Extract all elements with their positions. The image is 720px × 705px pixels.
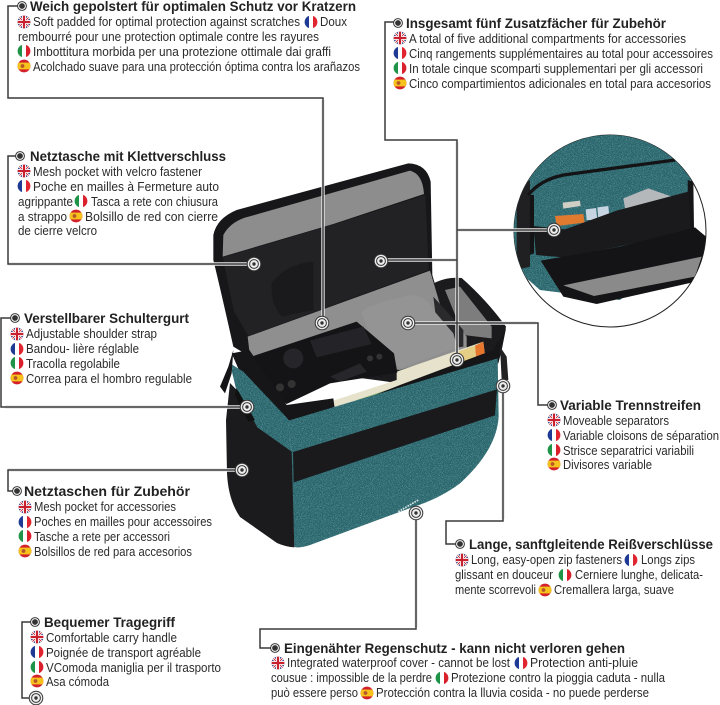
- heading: rain cover: Eingenähter Regenschutz - kann nicht verloren gehen: [284, 640, 625, 656]
- bag body: [220, 328, 508, 547]
- panel: adjustable shoulder strap: [10, 310, 192, 386]
- camera: [249, 322, 397, 404]
- panel: mesh pocket with velcro: Poche en mailles à Fermeture auto: [33, 180, 219, 194]
- panel: mesh pockets for accessories: Poches en mailles pour accessoires: [34, 515, 212, 529]
- panel: mesh pockets for accessories: [13, 483, 212, 559]
- panel: five additional compartments: A total of five additional compartments for accessories: [409, 32, 686, 46]
- panel: mesh pockets for accessories: Bolsillos de red para accesorios: [34, 545, 192, 559]
- panel: long zip fasteners: Cremallera larga, suave: [554, 583, 674, 597]
- panel: long zip fasteners: glissant en douceur: [455, 568, 553, 582]
- panel: five additional compartments: In totale cinque scomparti supplementari per gli accessori: [409, 62, 703, 76]
- panel: integrated rain cover: Protection anti-pluie: [530, 656, 638, 670]
- panel: adjustable shoulder strap: Correa para el hombro regulable: [26, 372, 192, 386]
- panel: carry handle: VComoda maniglia per il trasporto: [46, 661, 221, 675]
- panel: carry handle: Asa cómoda: [46, 675, 109, 689]
- bag lid: [213, 163, 437, 357]
- heading: compartments: Insgesamt fünf Zusatzfächer für Zubehör: [406, 15, 667, 31]
- panel: mesh pocket with velcro: Mesh pocket with velcro fastener: [33, 165, 202, 179]
- panel: long zip fasteners: [455, 536, 713, 597]
- panel: mesh pocket with velcro: [16, 148, 226, 238]
- panel: soft padded: Acolchado suave para una protección óptima contra los arañazos: [33, 60, 360, 74]
- panel: mesh pocket with velcro: a strappo: [18, 210, 67, 224]
- leader lines: [1, 6, 554, 698]
- panel: mesh pockets for accessories: Mesh pocket for accessories: [34, 500, 176, 514]
- panel: long zip fasteners: mente scorrevoli: [455, 583, 536, 597]
- target markers: [29, 223, 561, 705]
- panel: moveable separators: [547, 397, 719, 472]
- panel: adjustable shoulder strap: Bandou- lière réglable: [26, 342, 139, 356]
- bag illustration: [213, 163, 508, 547]
- panel: mesh pocket with velcro: de cierre velcro: [18, 224, 97, 238]
- panel: long zip fasteners: Cerniere lunghe, delicata-: [575, 568, 703, 582]
- heading: separators: Variable Trennstreifen: [560, 397, 701, 413]
- heading: mesh pocket with velcro: Netztasche mit Klettverschluss: [30, 148, 226, 164]
- panel: long zip fasteners: Long, easy-open zip fasteners: [471, 553, 622, 567]
- panel: integrated rain cover: Integrated waterproof cover - cannot be lost: [287, 656, 510, 670]
- panel: soft padded: [17, 0, 360, 74]
- panel: mesh pocket with velcro: agrippante: [18, 195, 73, 209]
- panel: soft padded: Doux: [320, 15, 348, 29]
- panel: soft padded: Imbottitura morbida per una protezione ottimale dai graffi: [33, 45, 331, 59]
- panel: soft padded: rembourré pour une protection optimale contre les rayures: [18, 30, 319, 44]
- panel: carry handle: [30, 614, 221, 689]
- panel: adjustable shoulder strap: Adjustable shoulder strap: [26, 327, 157, 341]
- panel: carry handle: Comfortable carry handle: [46, 631, 177, 645]
- panel: integrated rain cover: cousue : impossible de la perdre: [271, 671, 432, 685]
- panel: integrated rain cover: può essere perso: [271, 686, 358, 700]
- heading: carry handle: Bequemer Tragegriff: [44, 614, 175, 630]
- bag interior with padded divider: [248, 271, 506, 383]
- panel: five additional compartments: [393, 15, 713, 91]
- panel: long zip fasteners: Longs zips: [641, 553, 695, 567]
- inset circle: accessory pockets: [513, 133, 706, 327]
- panel: soft padded: Soft padded for optimal protection against scratches: [33, 15, 300, 29]
- panel: carry handle: Poignée de transport agréable: [46, 646, 201, 660]
- map: [333, 342, 485, 411]
- heading: mesh pockets: Netztaschen für Zubehör: [24, 483, 191, 499]
- panel: mesh pockets for accessories: Tasche a rete per accessori: [34, 530, 170, 544]
- panel: integrated rain cover: Protezione contro la pioggia caduta - nulla: [451, 671, 665, 685]
- panel: moveable separators: Moveable separators: [563, 414, 669, 428]
- panel: moveable separators: Strisce separatrici variabili: [563, 444, 694, 458]
- panel: integrated rain cover: [271, 640, 665, 700]
- panel: integrated rain cover: Protección contra la lluvia cosida - no puede perderse: [376, 686, 649, 700]
- panel: mesh pocket with velcro: Bolsillo de red con cierre: [85, 210, 218, 224]
- panel: adjustable shoulder strap: Tracolla regolabile: [26, 357, 120, 371]
- heading: shoulder strap: Verstellbarer Schultergurt: [24, 310, 189, 326]
- panel: mesh pocket with velcro: Tasca a rete con chiusura: [91, 195, 218, 209]
- panel: moveable separators: Divisores variable: [563, 458, 652, 472]
